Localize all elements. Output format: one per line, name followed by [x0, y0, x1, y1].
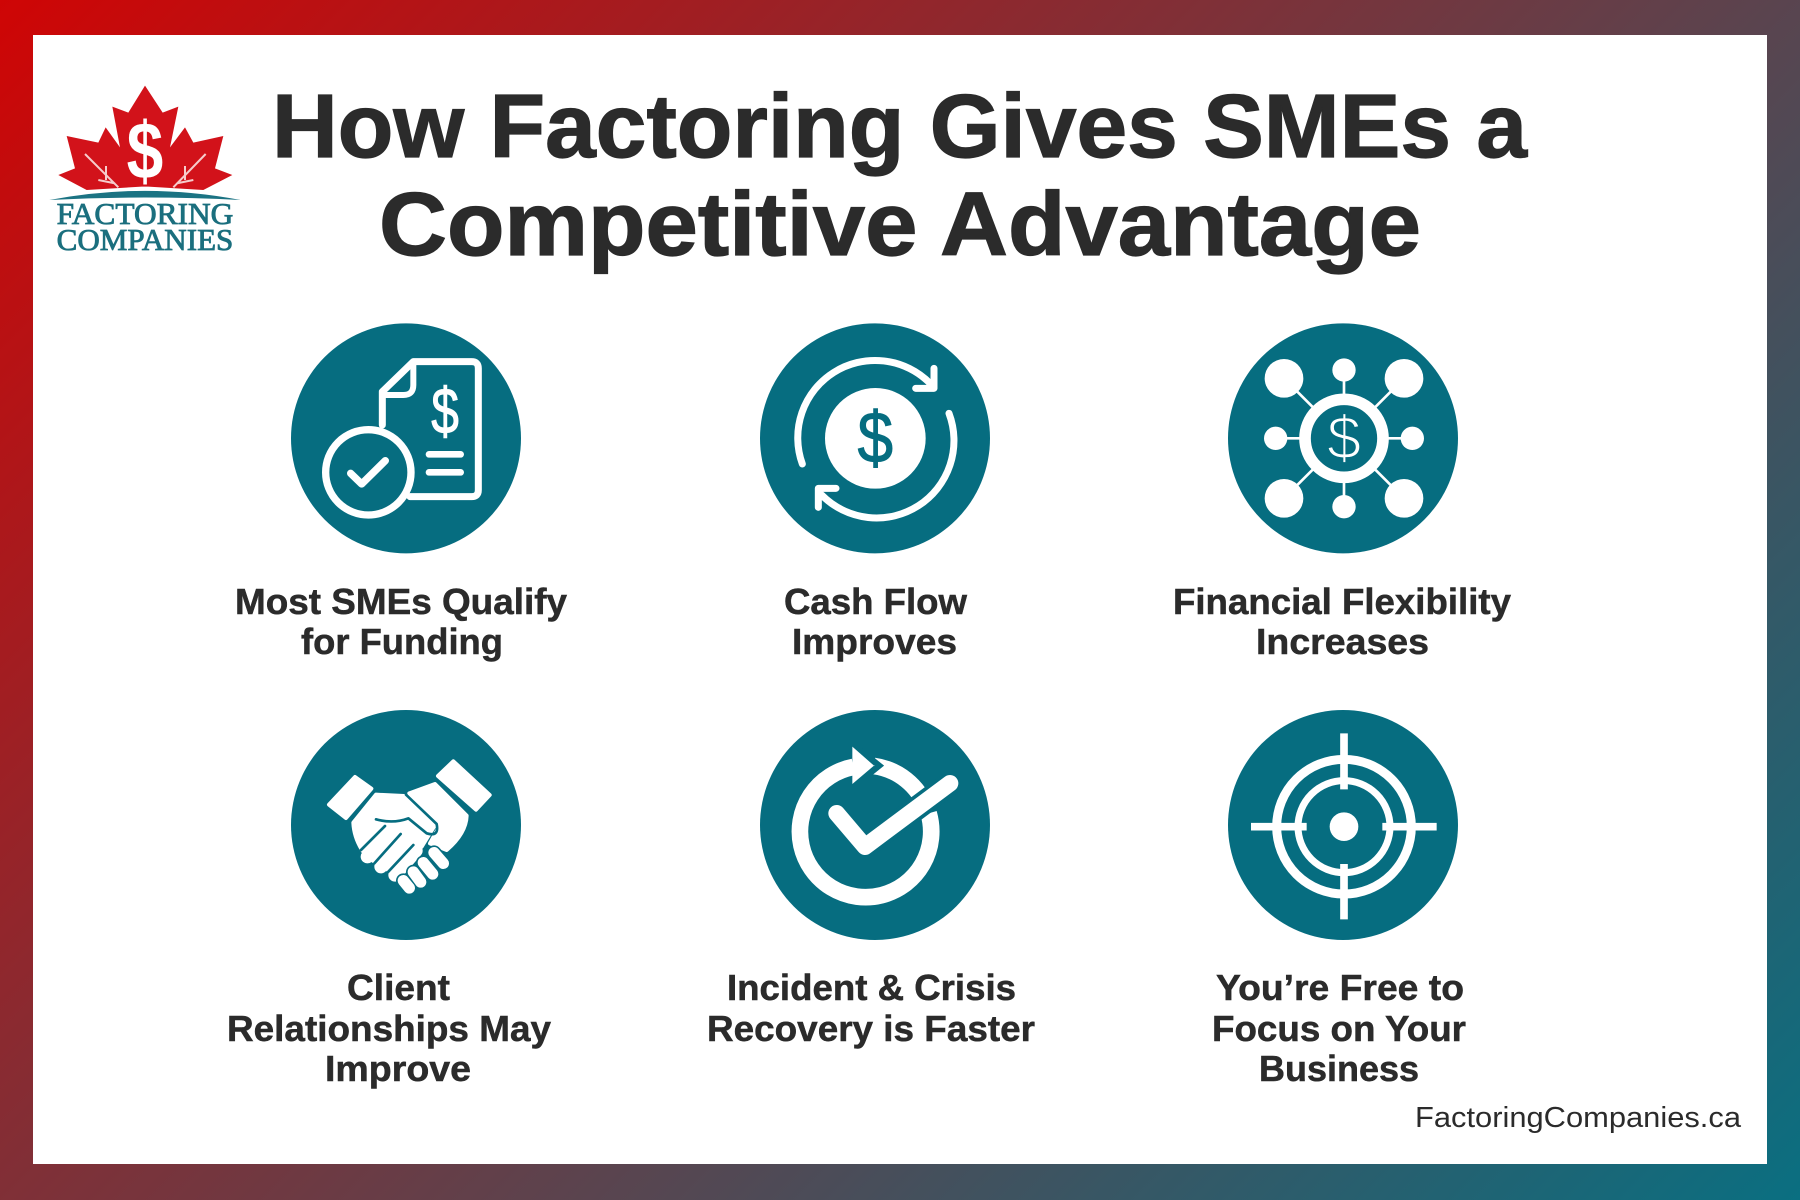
icon: cash flow cycle	[760, 323, 990, 553]
maple leaf	[58, 86, 232, 190]
label: Financial Flexibility Increases: Increases	[1256, 621, 1429, 662]
icon: invoice with checkmark	[291, 323, 521, 553]
icon: crisis recovery checkmark	[760, 710, 990, 940]
label: Most SMEs Qualify for Funding: for Funding	[301, 621, 503, 662]
label: Client Relationships May Improve: Client	[347, 967, 450, 1008]
title: Competitive Advantage	[379, 175, 1421, 275]
title	[272, 77, 1528, 275]
icon: financial network	[1228, 323, 1458, 553]
label: Cash Flow Improves	[784, 581, 968, 662]
label: Incident & Crisis Recovery is Faster: Recovery is Faster	[707, 1008, 1035, 1049]
label: You're Free to Focus on Your Business	[1212, 967, 1466, 1089]
label: Financial Flexibility Increases: Financial Flexibility	[1173, 581, 1511, 622]
logo wordmark	[57, 197, 233, 257]
label: Most SMEs Qualify for Funding	[235, 581, 567, 662]
label: Client Relationships May Improve: Improve	[325, 1048, 471, 1089]
logo: Factoring Companies maple leaf	[49, 86, 241, 257]
label: You're Free to Focus on Your Business: Focus on Your	[1212, 1008, 1466, 1049]
icon: cash flow cycle: $	[858, 397, 893, 479]
icon: handshake	[291, 710, 521, 940]
label: Incident & Crisis Recovery is Faster	[707, 967, 1035, 1049]
label: Client Relationships May Improve: Relationships May	[227, 1008, 551, 1049]
label: Incident & Crisis Recovery is Faster: Incident & Crisis	[727, 967, 1016, 1008]
icon: invoice with checkmark: $	[431, 375, 459, 448]
label: Client Relationships May Improve	[227, 967, 551, 1089]
label: Cash Flow Improves: Cash Flow	[784, 581, 968, 622]
icon: target crosshair	[1228, 710, 1458, 940]
leaf veins	[85, 154, 206, 187]
teal arc	[49, 191, 241, 200]
label: Cash Flow Improves: Improves	[792, 621, 957, 662]
label: Financial Flexibility Increases	[1173, 581, 1511, 662]
label: Most SMEs Qualify for Funding: Most SMEs Qualify	[235, 581, 567, 622]
title: How Factoring Gives SMEs a	[272, 77, 1528, 177]
website credit: FactoringCompanies.ca	[1415, 1102, 1742, 1134]
label: You're Free to Focus on Your Business: Business	[1259, 1048, 1419, 1089]
logo wordmark: COMPANIES	[57, 223, 233, 257]
icon: financial network: $	[1327, 403, 1361, 472]
dollar sign: $	[127, 106, 163, 196]
label: You're Free to Focus on Your Business: You’re Free to	[1216, 967, 1464, 1008]
logo wordmark: FACTORING	[57, 197, 233, 231]
